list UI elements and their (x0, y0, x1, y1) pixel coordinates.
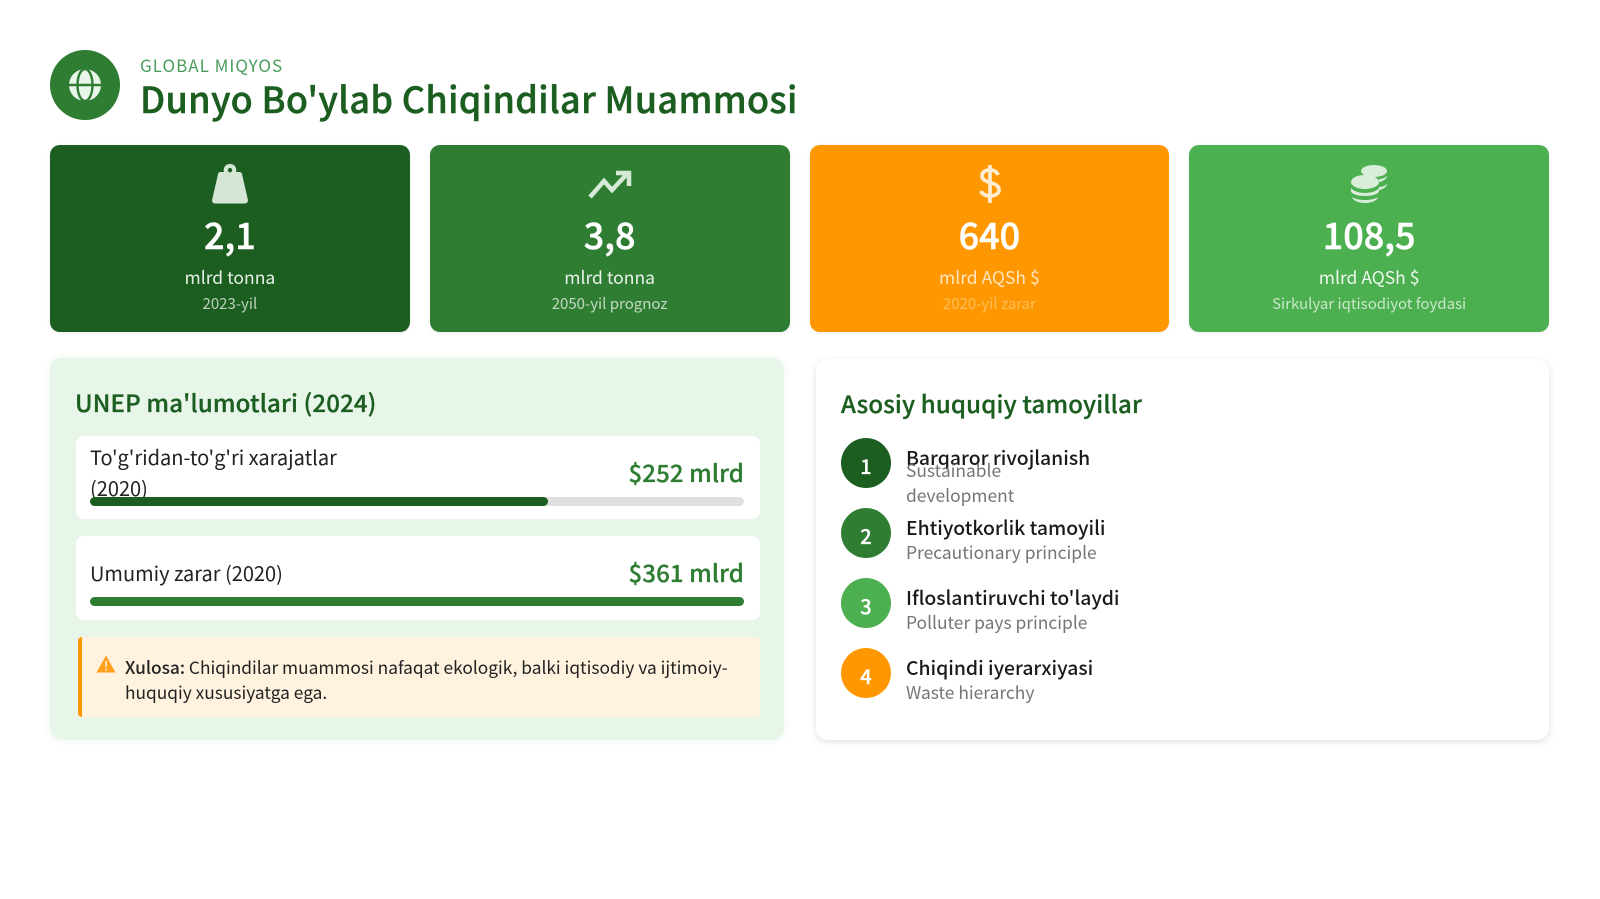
row label: Umumiy zarar (2020) (90, 558, 283, 587)
number badge: 1 (860, 451, 872, 480)
title: Dunyo Bo'ylab Chiqindilar Muammosi (140, 72, 798, 124)
principle 3 (841, 578, 1120, 635)
number badge (841, 578, 891, 628)
panel heading: Asosiy huquqiy tamoyillar (841, 385, 1142, 420)
principle subtitle: Sustainable (906, 458, 1001, 483)
principle name: Chiqindi iyerarxiyasi (906, 653, 1093, 681)
panel: legal principles (816, 359, 1549, 740)
progress bar 70% (90, 497, 744, 506)
row value: $361 mlrd (629, 554, 744, 589)
row label (90, 442, 337, 502)
principle name: Barqaror rivojlanish (906, 443, 1090, 471)
callout text: Xulosa: Chiqindilar muammosi nafaqat ekologik, balki iqtisodiy va ijtimoiy- (125, 654, 728, 679)
number badge: 3 (860, 591, 872, 620)
principle subtitle (906, 458, 1014, 508)
callout text: huquqiy xususiyatga ega. (125, 679, 327, 704)
note: 2020-yil zarar (943, 293, 1036, 314)
icon: warning (96, 656, 116, 672)
principle name: Ehtiyotkorlik tamoyili (906, 513, 1105, 541)
unit: mlrd AQSh $ (1319, 265, 1419, 290)
stat card: 108,5 mlrd AQSh $ (1189, 145, 1549, 332)
unit: mlrd AQSh $ (939, 265, 1040, 290)
value: 3,8 (584, 208, 636, 260)
row label: (2020) (90, 473, 148, 502)
icon: dollar (979, 165, 1001, 203)
stat card: 2,1 mlrd tonna (50, 145, 410, 332)
note: 2050-yil prognoz (552, 293, 668, 314)
row: direct costs (76, 436, 760, 519)
number badge: 2 (860, 521, 872, 550)
stat card: 640 mlrd AQSh $ (810, 145, 1169, 332)
value: 2,1 (204, 208, 256, 260)
note: 2023-yil (203, 293, 257, 314)
value: 108,5 (1323, 208, 1416, 260)
note: Sirkulyar iqtisodiyot foydasi (1272, 293, 1466, 314)
number badge: 4 (860, 661, 872, 690)
icon: weight (212, 164, 248, 204)
principle subtitle: development (906, 483, 1014, 508)
stat card: 3,8 mlrd tonna (430, 145, 790, 332)
callout: conclusion (78, 637, 760, 717)
icon: trend arrow (588, 170, 632, 198)
eyebrow label: GLOBAL MIQYOS (140, 52, 283, 77)
number badge (841, 508, 891, 558)
icon: coins (1351, 165, 1387, 203)
unit: mlrd tonna (564, 265, 655, 290)
principle 2 (841, 508, 1105, 565)
panel: UNEP data (50, 358, 784, 740)
row value: $252 mlrd (629, 454, 744, 489)
progress bar 100% (90, 597, 744, 606)
principle name: Ifloslantiruvchi to'laydi (906, 583, 1120, 611)
callout text (125, 654, 728, 704)
row: total damage (76, 536, 760, 620)
principle subtitle: Precautionary principle (906, 540, 1097, 565)
principle subtitle: Waste hierarchy (906, 680, 1034, 705)
panel heading: UNEP ma'lumotlari (2024) (75, 384, 376, 419)
header icon: globe (50, 50, 120, 120)
principle 1 (841, 438, 1090, 508)
principle subtitle: Polluter pays principle (906, 610, 1087, 635)
unit: mlrd tonna (185, 265, 275, 290)
row label: To'g'ridan-to'g'ri xarajatlar (90, 442, 337, 471)
number badge (841, 648, 891, 698)
value: 640 (959, 208, 1020, 260)
principle 4 (841, 648, 1093, 705)
number badge (841, 438, 891, 488)
